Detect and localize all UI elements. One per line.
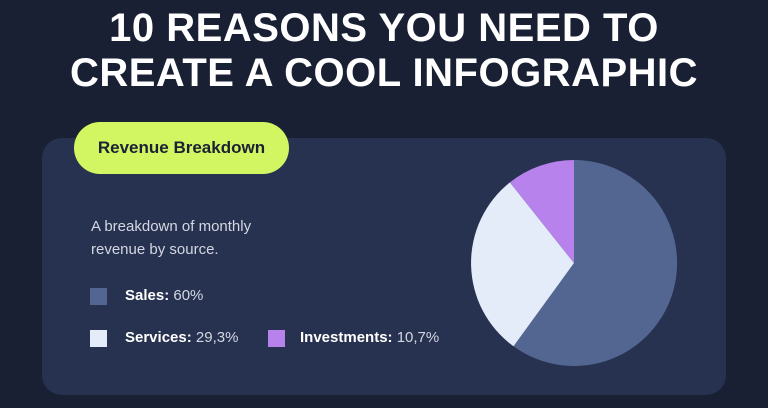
title [70, 6, 698, 95]
legend: services: Services: 29,3% [125, 329, 238, 346]
legend: sales: Sales: 60% [125, 287, 203, 304]
title: 10 REASONS YOU NEED TO [109, 6, 659, 50]
heading pill: Revenue Breakdown [98, 138, 265, 157]
description: A breakdown of monthly [91, 218, 251, 235]
description [91, 218, 252, 258]
legend: investments: Investments: 10,7% [300, 329, 439, 346]
heading pill [74, 122, 289, 174]
panel: revenue breakdown [42, 138, 726, 395]
legend: sales [90, 287, 203, 305]
title: CREATE A COOL INFOGRAPHIC [70, 51, 698, 95]
description: revenue by source. [91, 241, 219, 258]
